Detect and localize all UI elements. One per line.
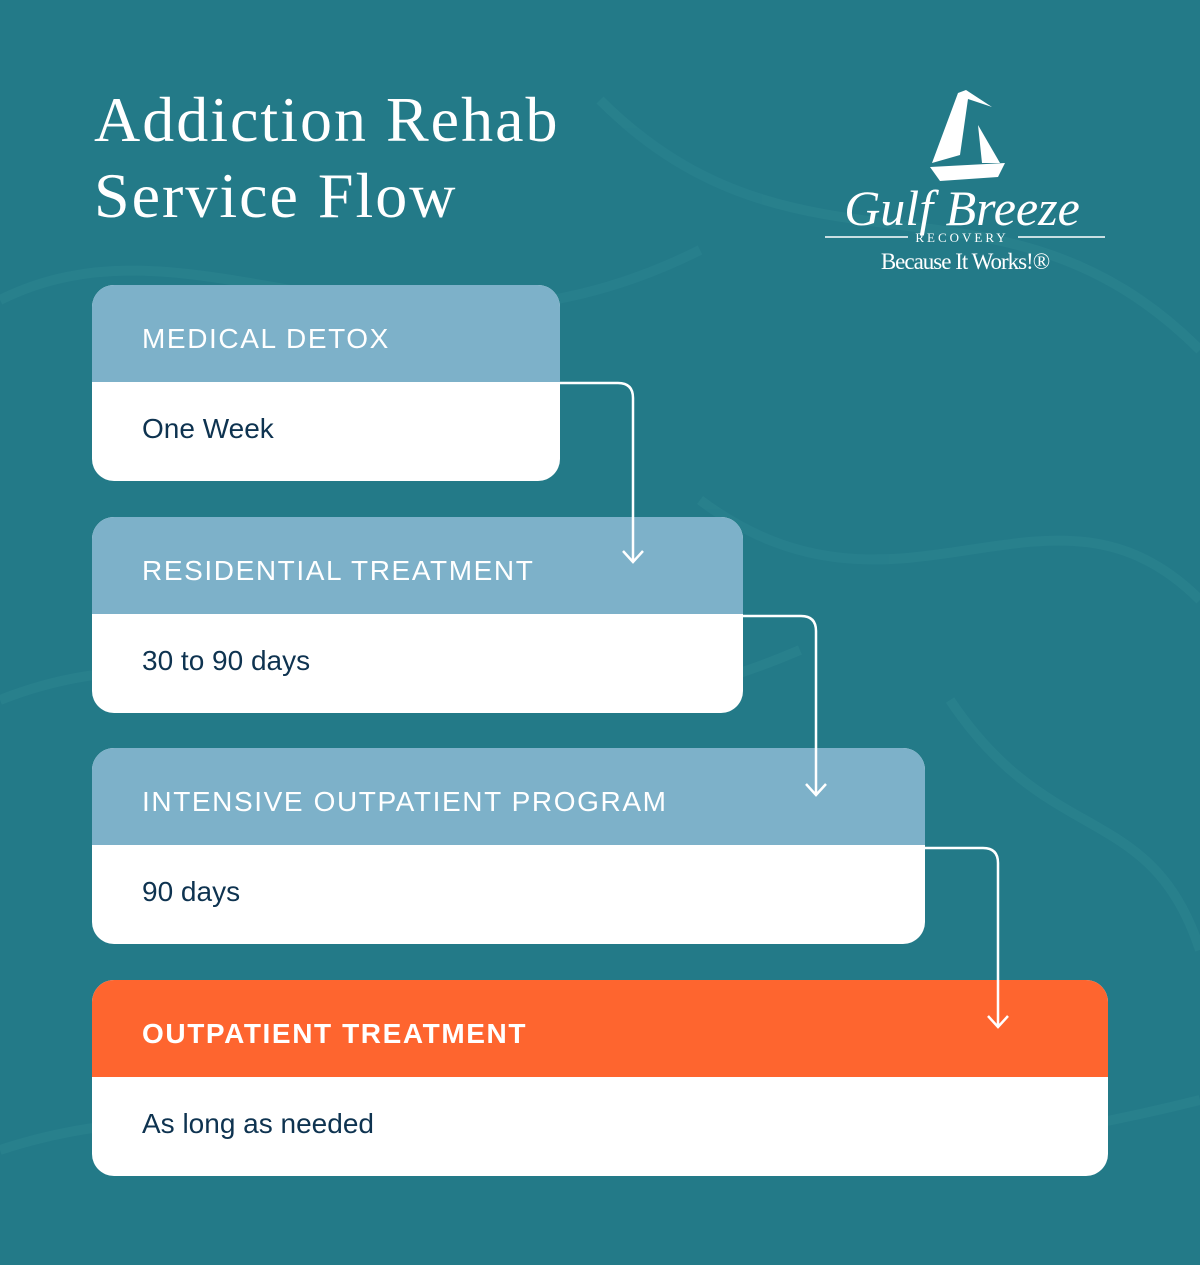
panel: medical detox: One Week [142, 413, 274, 444]
panel: outpatient treatment: OUTPATIENT TREATMENT [142, 1018, 527, 1049]
panel: intensive outpatient: 90 days [142, 876, 240, 907]
panel: residential treatment: 30 to 90 days [142, 645, 310, 676]
panel: residential treatment: RESIDENTIAL TREATMENT [142, 555, 534, 586]
panel: medical detox: MEDICAL DETOX [142, 323, 390, 354]
logo: RECOVERY [915, 230, 1009, 245]
panel: intensive outpatient [92, 748, 925, 944]
logo: Because It Works!® [881, 249, 1050, 274]
title: Addiction Rehab [94, 84, 559, 155]
logo [825, 90, 1105, 274]
panel: medical detox [92, 285, 560, 481]
panel: intensive outpatient: INTENSIVE OUTPATIENT PROGRAM [142, 786, 668, 817]
panel: residential treatment [92, 517, 743, 713]
panel: outpatient treatment: As long as needed [142, 1108, 374, 1139]
title: Service Flow [94, 160, 458, 231]
logo: Gulf Breeze [844, 180, 1080, 236]
icon: sailboat [930, 90, 1005, 181]
title [94, 84, 559, 231]
panel: outpatient treatment [92, 980, 1108, 1176]
